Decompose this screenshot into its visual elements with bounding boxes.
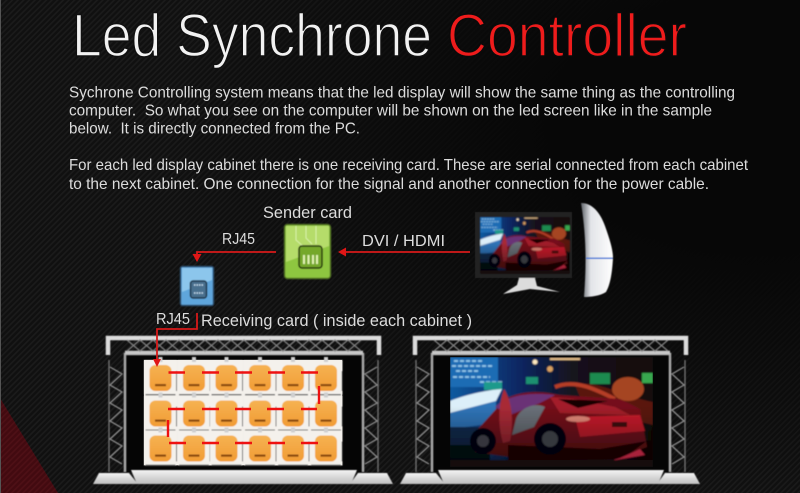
monitor (475, 212, 572, 278)
label: RJ45 upper: RJ45 (222, 231, 255, 248)
intro text block: computer. So what you see on the computer will be shown on the led screen like in the sample (69, 102, 712, 120)
intro text block (69, 84, 735, 138)
label: DVI / HDMI: DVI / HDMI (362, 233, 445, 250)
title (72, 2, 687, 69)
label: sender card: Sender card (263, 203, 352, 222)
receiving cards grid (144, 357, 342, 466)
cabinet text block: For each led display cabinet there is one receiving card. These are serial connected from each cabinet (69, 157, 749, 174)
label: RJ45 lower: RJ45 (156, 311, 190, 328)
icon: receiving card (180, 266, 214, 306)
arrow: sender card to receiving card (192, 252, 276, 262)
arrow: RJ45 down into first cabinet (153, 313, 197, 367)
red serial connections (168, 372, 319, 443)
truss frame (400, 334, 700, 485)
label: receiving card: Receiving card ( inside each cabinet ) (201, 311, 472, 330)
title: Controller (447, 2, 687, 69)
intro text block: below. It is directly connected from the PC. (69, 120, 360, 138)
cabinet text block (69, 157, 749, 193)
icon: sender card (284, 224, 330, 278)
right stage: car image on screen (400, 338, 700, 484)
screen image (450, 357, 653, 466)
icon: computer with monitor and tower (475, 203, 613, 297)
monitor stand (503, 278, 560, 294)
intro text block: Sychrone Controlling system means that the led display will show the same thing as the controlling (69, 84, 735, 102)
arrow: computer to sender card (338, 248, 470, 256)
title: Led Synchrone (72, 2, 432, 69)
monitor screen image (479, 216, 571, 274)
cabinet text block: to the next cabinet. One connection for the signal and another connection for the power cable. (69, 176, 709, 193)
tower (581, 203, 613, 297)
cabinet panel (144, 360, 342, 465)
truss frame (92, 334, 394, 485)
left stage: cabinet wiring (93, 338, 393, 484)
